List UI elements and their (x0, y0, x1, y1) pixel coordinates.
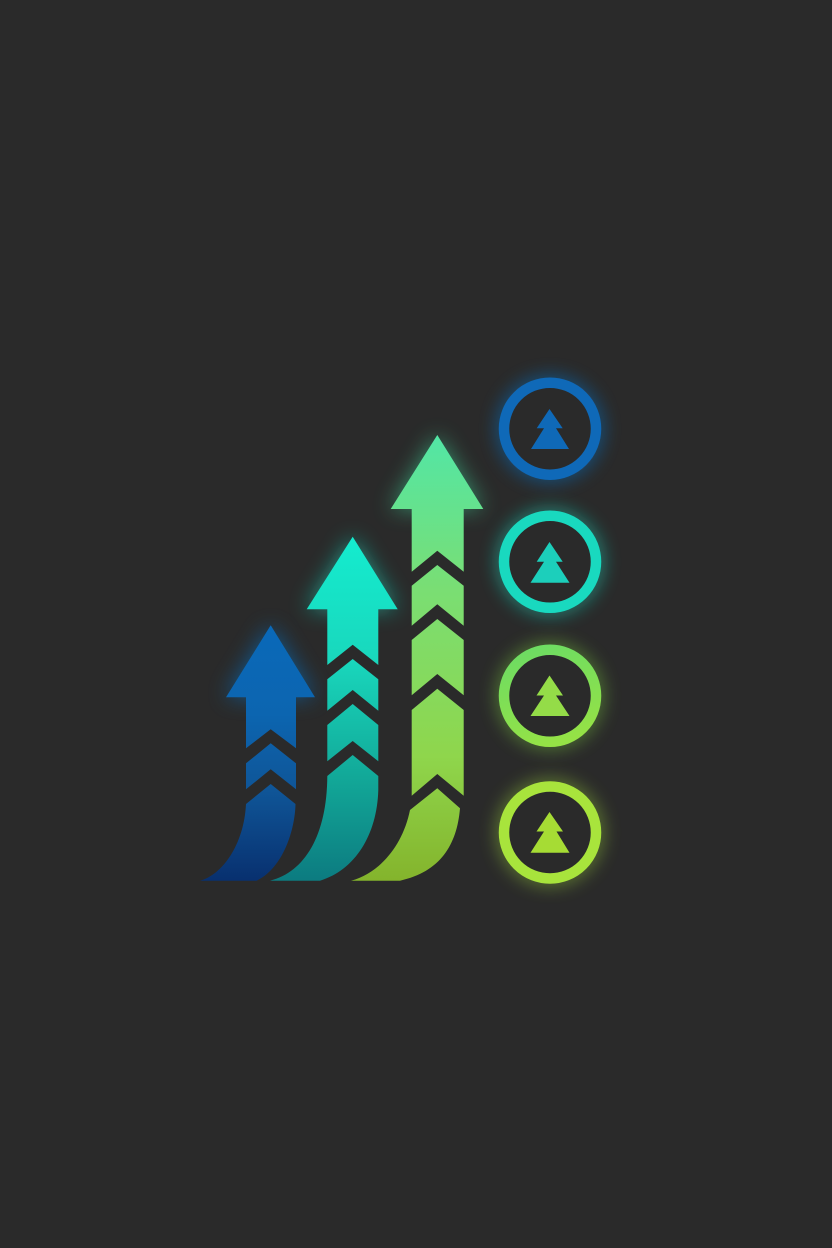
glow: green ring (504, 650, 596, 742)
badge: lime circle (504, 786, 596, 878)
glow: blue arrow head (226, 625, 315, 697)
badge: teal circle (504, 516, 596, 608)
icon: blue tree arrow (531, 409, 569, 449)
glow: blue ring (504, 383, 596, 475)
glow: teal arrow head (307, 537, 398, 609)
icon: lime tree arrow (530, 812, 570, 853)
lime ring (504, 786, 596, 878)
arrow: green, tallest (351, 435, 483, 881)
icon: green tree arrow (530, 676, 570, 716)
badge: blue circle (504, 383, 596, 475)
glow: lime ring (504, 786, 596, 878)
teal ring (504, 516, 596, 608)
badge: green circle (504, 650, 596, 742)
green ring (504, 650, 596, 742)
blue ring (504, 383, 596, 475)
blue arrow body (200, 625, 315, 881)
glow: green arrow head (391, 435, 483, 509)
arrow: teal, middle (270, 537, 398, 881)
glow: teal ring (504, 516, 596, 608)
arrow: blue, shortest (200, 625, 315, 881)
green arrow body (351, 435, 483, 881)
icon: teal tree arrow (530, 542, 570, 583)
teal arrow body (270, 537, 398, 881)
